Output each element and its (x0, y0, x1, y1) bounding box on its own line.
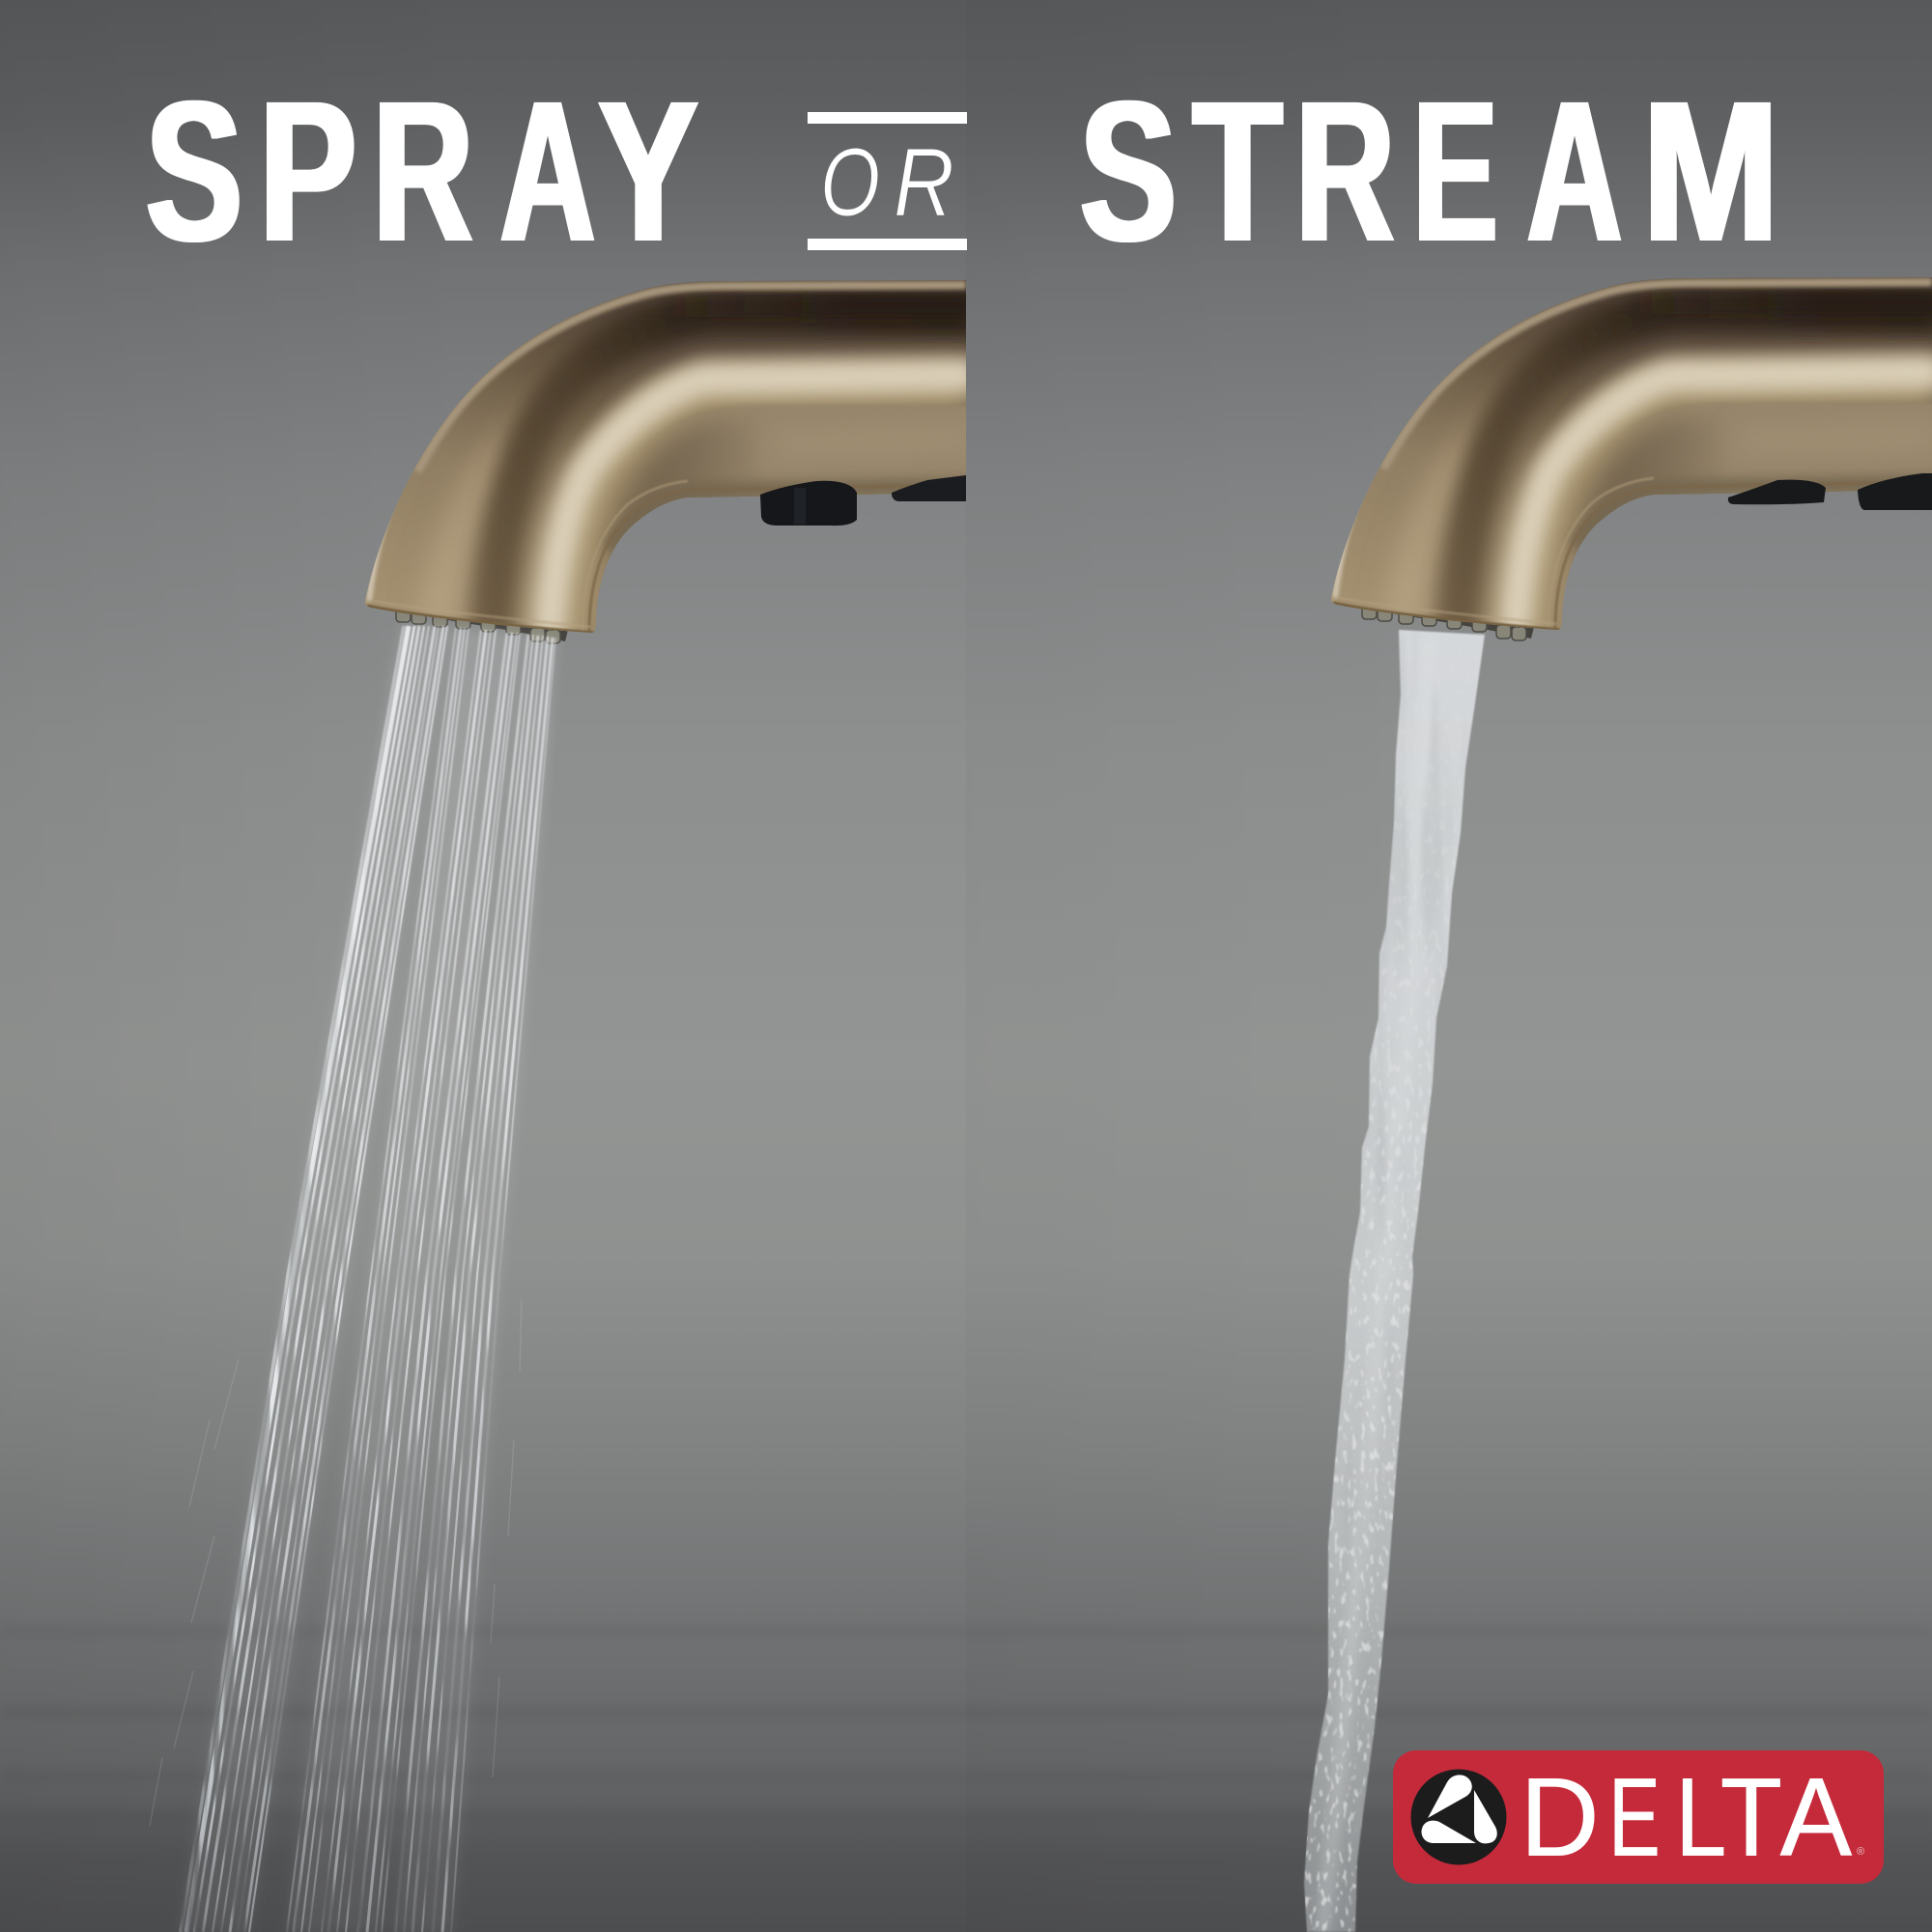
spray water streaks (150, 626, 557, 1932)
title word: SPRAY (146, 58, 698, 284)
right faucet first button (1728, 480, 1826, 504)
"or" divider with rules: R (894, 128, 954, 236)
Delta logo badge (1393, 1750, 1884, 1884)
registered mark: ® (1857, 1846, 1864, 1858)
title word: SPRAY: R (373, 59, 473, 283)
title word: STREAM (1080, 59, 1779, 284)
brand wordmark: L (1676, 1755, 1726, 1880)
brand wordmark (1520, 1755, 1852, 1881)
left faucet: spray mode (365, 280, 976, 643)
title word: SPRAY: Y (598, 60, 698, 284)
title word: SPRAY: S (146, 60, 242, 284)
solid stream of water (1303, 629, 1486, 1932)
title word: STREAM: M (1642, 60, 1779, 284)
title (146, 58, 1779, 284)
title word: STREAM: R (1295, 59, 1395, 283)
"or" divider with rules: O (820, 129, 880, 237)
title word: STREAM: E (1413, 59, 1497, 283)
title word: SPRAY: A (500, 60, 595, 284)
brand wordmark: A (1780, 1755, 1852, 1881)
right faucet second button (1858, 473, 1932, 510)
title word: STREAM: S (1080, 60, 1177, 284)
left faucet large button (760, 481, 857, 526)
"or" divider with rules (808, 112, 967, 250)
logo emblem: circle with three white lobes (1410, 1770, 1507, 1864)
brand wordmark: T (1720, 1755, 1782, 1880)
brand wordmark: E (1609, 1755, 1660, 1881)
title word: STREAM: A (1526, 60, 1622, 284)
left faucet small button (892, 475, 966, 501)
title word: SPRAY: P (259, 58, 356, 284)
right faucet: stream mode (1331, 277, 1932, 640)
brand wordmark: D (1520, 1755, 1599, 1880)
title word: STREAM: T (1192, 59, 1283, 283)
